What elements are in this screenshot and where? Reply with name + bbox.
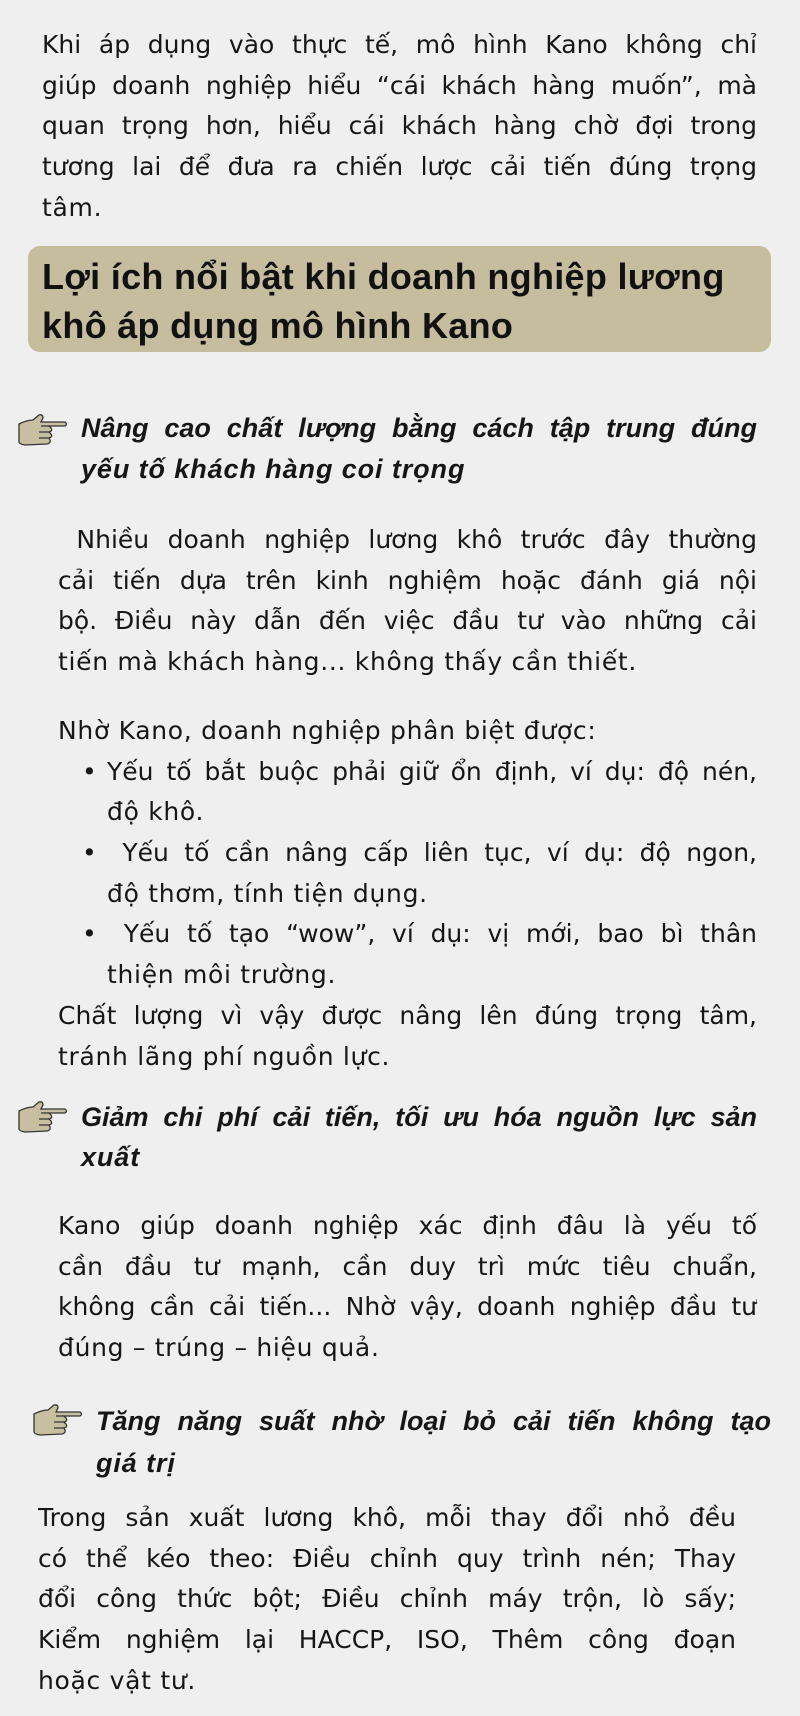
heading 3: giá trị [96,1448,176,1478]
intro paragraph: Khi áp dụng vào thực tế, mô hình Kano không chỉ [42,30,757,59]
section 1 list: Yếu tố bắt buộc phải giữ ổn định, ví dụ: độ nén, [107,757,757,786]
intro paragraph: quan trọng hơn, hiểu cái khách hàng chờ đợi trong [42,111,757,140]
section 2 body: đúng – trúng – hiệu quả. [58,1333,380,1362]
section 2 body [58,1211,757,1362]
section 1 body: bộ. Điều này dẫn đến việc đầu tư vào những cải [58,606,757,635]
section 1 body: cải tiến dựa trên kinh nghiệm hoặc đánh giá nội [58,566,757,595]
section 1 list: Yếu tố tạo “wow”, ví dụ: vị mới, bao bì thân [124,919,757,948]
intro paragraph: tương lai để đưa ra chiến lược cải tiến đúng trọng [42,152,757,181]
section 3 body: Trong sản xuất lương khô, mỗi thay đổi nhỏ đều [38,1503,736,1532]
section 1 body: Nhiều doanh nghiệp lương khô trước đây thường [76,525,757,554]
heading 1: yếu tố khách hàng coi trọng [81,454,465,484]
heading 3: Tăng năng suất nhờ loại bỏ cải tiến không tạo [96,1406,771,1436]
section 1 list: Yếu tố cần nâng cấp liên tục, ví dụ: độ ngon, [122,838,757,867]
section 1 list: • [82,757,97,786]
section 3 body: đổi công thức bột; Điều chỉnh máy trộn, lò sấy; [38,1584,736,1613]
section header [28,246,771,352]
section 1 list: • [82,919,97,948]
section 1 list: • [82,838,97,867]
section header: Lợi ích nổi bật khi doanh nghiệp lương [42,256,725,297]
section 1 body: tiến mà khách hàng... không thấy cần thiết. [58,647,637,676]
heading 1 [80,413,757,484]
icon: hand 3 [33,1404,82,1436]
section 1 list: độ khô. [107,797,204,826]
heading 2: Giảm chi phí cải tiến, tối ưu hóa nguồn lực sản [81,1102,757,1132]
section 1 list: Chất lượng vì vậy được nâng lên đúng trọng tâm, [58,1001,757,1030]
section 3 body: hoặc vật tư. [38,1666,196,1695]
section 3 body [38,1503,736,1695]
heading 3 [96,1406,771,1478]
section 1 list [58,716,757,1070]
icon: hand 1 [18,414,68,446]
section 1 list: tránh lãng phí nguồn lực. [58,1042,390,1070]
intro paragraph: tâm. [42,193,102,222]
section header: khô áp dụng mô hình Kano [42,305,513,346]
section 1 list: Nhờ Kano, doanh nghiệp phân biệt được: [58,716,596,745]
intro paragraph: giúp doanh nghiệp hiểu “cái khách hàng muốn”, mà [42,71,757,100]
section 2 body: cần đầu tư mạnh, cần duy trì mức tiêu chuẩn, [58,1252,757,1281]
heading 2 [80,1102,757,1172]
section 2 body: không cần cải tiến... Nhờ vậy, doanh nghiệp đầu tư [58,1292,757,1321]
section 1 list: độ thơm, tính tiện dụng. [107,879,428,908]
section 3 body: có thể kéo theo: Điều chỉnh quy trình nén; Thay [38,1544,736,1573]
heading 1: Nâng cao chất lượng bằng cách tập trung đúng [81,413,757,443]
section 1 body [58,525,757,676]
intro paragraph [42,30,757,222]
section 1 list: thiện môi trường. [107,960,336,989]
icon: hand 2 [18,1101,68,1133]
section 2 body: Kano giúp doanh nghiệp xác định đâu là yếu tố [58,1211,757,1240]
heading 2: xuất [81,1142,140,1172]
section 3 body: Kiểm nghiệm lại HACCP, ISO, Thêm công đoạn [38,1625,736,1654]
